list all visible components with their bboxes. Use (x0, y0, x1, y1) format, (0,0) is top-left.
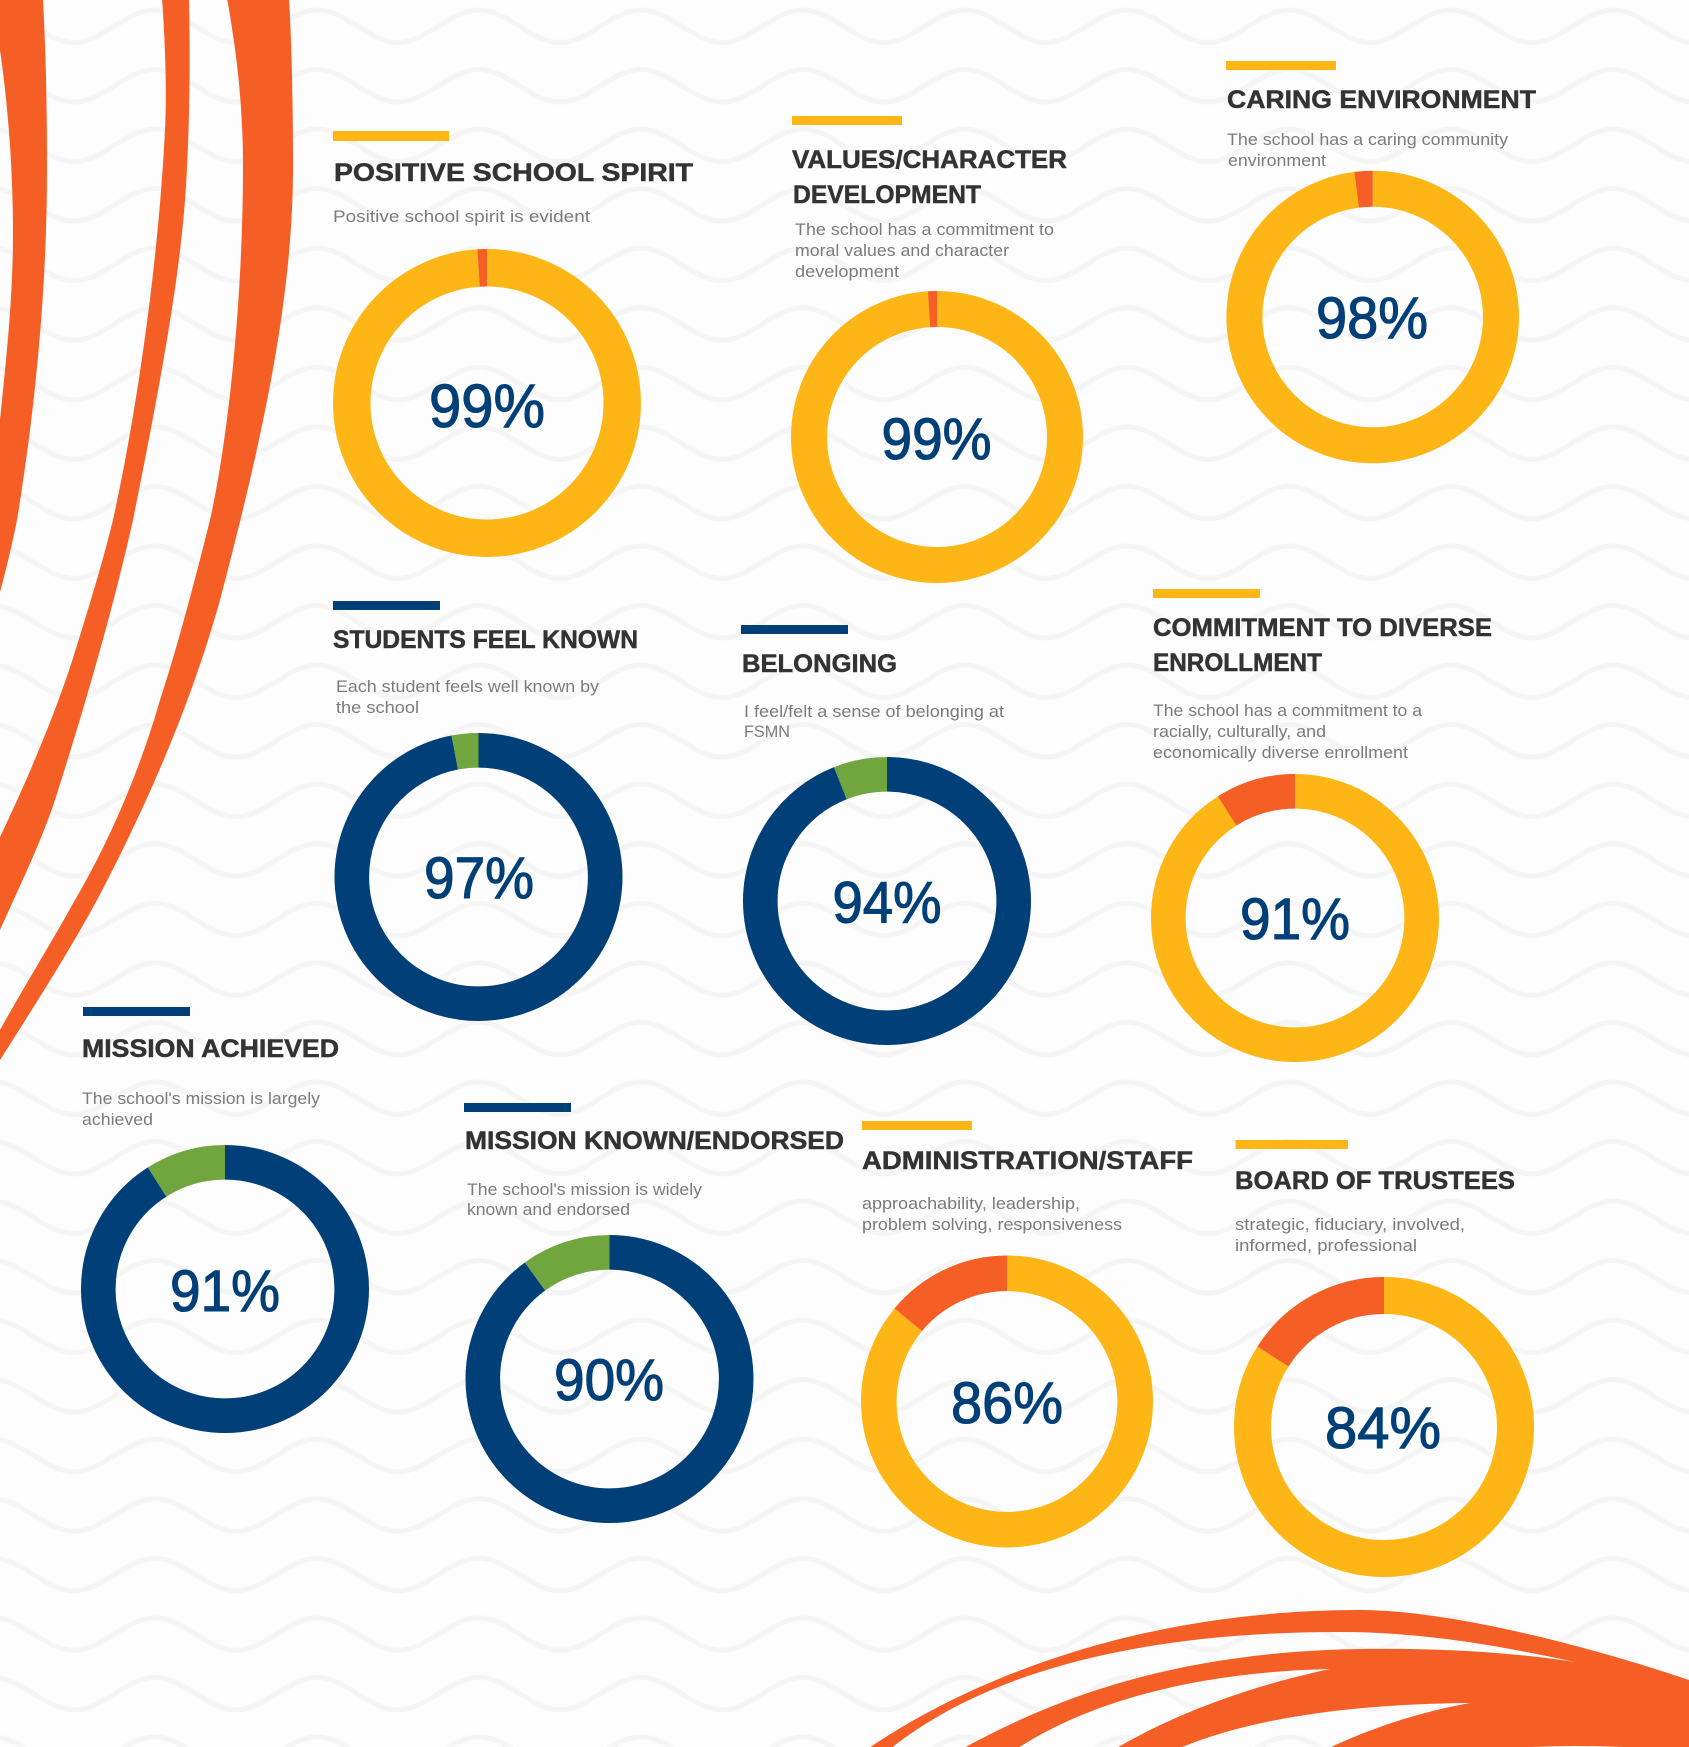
description: achieved (82, 1110, 153, 1129)
description: The school has a caring community (1227, 130, 1509, 149)
panel: values/character development (792, 116, 1067, 565)
value: 84% (1325, 1396, 1441, 1461)
accent bar (1236, 1140, 1348, 1149)
donut chart 98% (1244, 189, 1501, 445)
decorative orange stripes top left (0, 0, 293, 1060)
panel: belonging (741, 625, 1014, 1028)
heading: STUDENTS FEEL KNOWN (333, 626, 638, 654)
panel: positive school spirit (333, 131, 693, 538)
description: environment (1228, 151, 1326, 170)
description: moral values and character (795, 241, 1009, 260)
description: The school has a commitment to (795, 220, 1054, 239)
heading: VALUES/CHARACTER (792, 146, 1067, 174)
description: racially, culturally, and (1153, 722, 1326, 741)
panel: commitment to diverse enrollment (1153, 589, 1492, 1045)
value: 98% (1316, 286, 1428, 351)
accent bar (83, 1007, 190, 1016)
description: FSMN (744, 722, 790, 741)
accent bar (792, 116, 902, 125)
panel: mission known/endorsed (464, 1103, 844, 1506)
description: economically diverse enrollment (1153, 743, 1408, 762)
value: 97% (424, 846, 534, 911)
panel: students feel known (333, 601, 638, 1004)
value: 91% (1240, 887, 1350, 952)
value: 99% (882, 407, 992, 472)
donut chart 94% (760, 774, 1014, 1028)
donut chart 90% (483, 1252, 736, 1506)
value: 86% (951, 1371, 1063, 1436)
accent bar (333, 131, 449, 141)
heading: BELONGING (742, 650, 897, 678)
accent bar (862, 1121, 972, 1130)
value: 99% (429, 372, 545, 440)
description: strategic, fiduciary, involved, (1235, 1215, 1465, 1234)
panel: board of trustees (1235, 1140, 1516, 1558)
description: the school (336, 698, 419, 717)
heading: CARING ENVIRONMENT (1227, 86, 1536, 114)
decorative orange swoosh bottom right (866, 1610, 1689, 1747)
value: 91% (170, 1259, 280, 1324)
description: development (795, 262, 899, 281)
heading: ENROLLMENT (1153, 649, 1322, 677)
description: I feel/felt a sense of belonging at (744, 702, 1004, 721)
value: 94% (832, 870, 942, 936)
description: The school's mission is largely (82, 1089, 321, 1108)
heading: MISSION ACHIEVED (82, 1035, 339, 1063)
panel: caring environment (1226, 61, 1536, 445)
heading: ADMINISTRATION/STAFF (862, 1147, 1193, 1175)
description: problem solving, responsiveness (862, 1215, 1122, 1234)
heading: COMMITMENT TO DIVERSE (1153, 614, 1492, 642)
description: The school has a commitment to a (1153, 701, 1423, 720)
description: Positive school spirit is evident (333, 207, 590, 226)
description: known and endorsed (467, 1200, 630, 1219)
donut chart 99% (352, 268, 622, 538)
donut chart 86% (879, 1273, 1135, 1530)
heading: POSITIVE SCHOOL SPIRIT (334, 159, 693, 187)
heading: MISSION KNOWN/ENDORSED (465, 1127, 844, 1155)
accent bar (1153, 589, 1260, 598)
panel: mission achieved (82, 1007, 352, 1416)
donut chart 97% (352, 750, 605, 1004)
accent bar (333, 601, 440, 610)
description: Each student feels well known by (336, 677, 600, 696)
donut chart 99% (809, 309, 1065, 565)
accent bar (464, 1103, 571, 1112)
description: approachability, leadership, (862, 1194, 1080, 1213)
panel: administration/staff (862, 1121, 1193, 1530)
heading: DEVELOPMENT (793, 181, 981, 209)
description: The school's mission is widely (467, 1180, 703, 1199)
donut chart 91% (1168, 791, 1422, 1045)
donut chart 91% (98, 1162, 352, 1416)
heading: BOARD OF TRUSTEES (1235, 1167, 1515, 1195)
accent bar (1226, 61, 1336, 70)
donut chart 84% (1252, 1296, 1516, 1558)
description: informed, professional (1235, 1236, 1417, 1255)
value: 90% (554, 1348, 664, 1413)
accent bar (741, 625, 848, 634)
